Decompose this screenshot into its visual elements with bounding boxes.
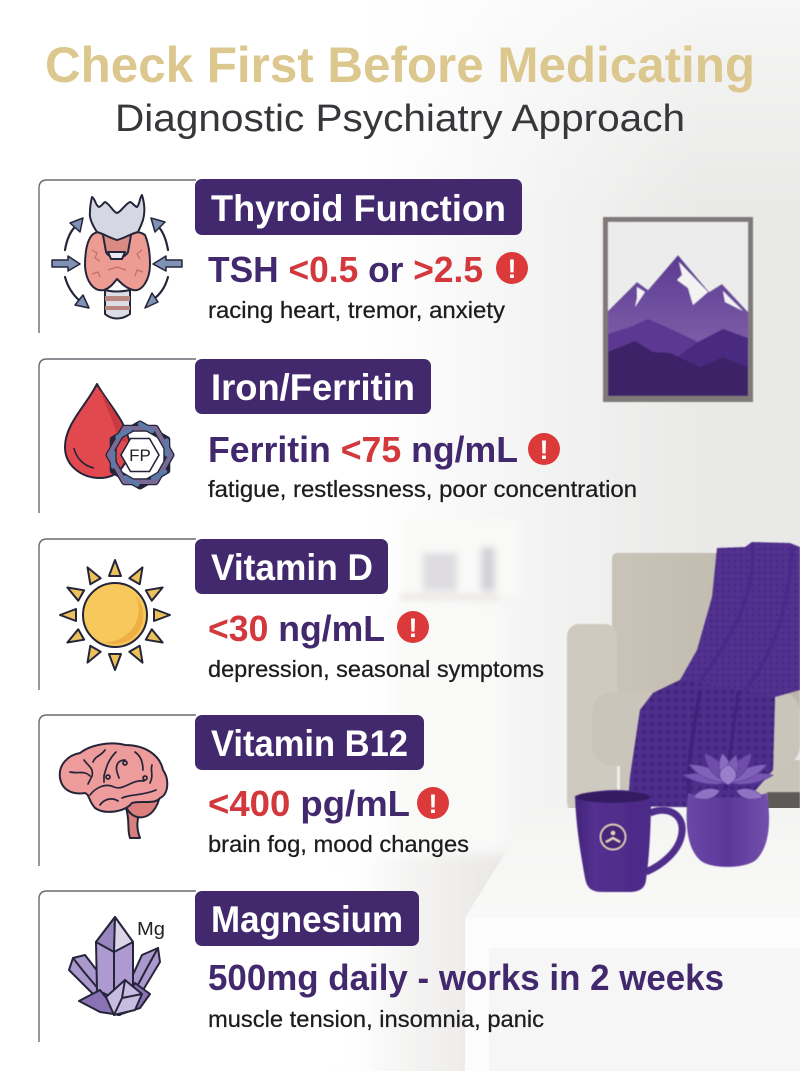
heading pill (195, 359, 431, 414)
heading pill: Vitamin B12 (211, 723, 408, 764)
symptoms: muscle tension, insomnia, panic (208, 1006, 544, 1032)
icon: sun (60, 560, 170, 670)
panel: vitamin b12 (39, 715, 469, 866)
wall art: framed mountains (603, 217, 753, 402)
title: Check First Before Medicating (45, 37, 755, 93)
icon: thyroid (52, 195, 182, 318)
lab threshold: ! (508, 254, 516, 284)
heading pill: Vitamin D (211, 547, 373, 588)
heading pill (195, 179, 522, 235)
purple mug (575, 790, 682, 892)
icon: blood drop with ferritin ring: FP (129, 446, 151, 465)
symptoms: brain fog, mood changes (208, 831, 469, 857)
panel: magnesium (39, 891, 724, 1042)
lab threshold: ! (540, 435, 548, 465)
heading pill: Thyroid Function (211, 188, 506, 229)
panel: iron/ferritin (39, 359, 637, 513)
heading pill: Magnesium (211, 899, 403, 940)
icon: blood drop with ferritin ring (65, 384, 171, 486)
icon: brain (60, 743, 167, 838)
purple knit blanket (628, 542, 800, 808)
lab threshold: TSH <0.5 or >2.5 (208, 249, 483, 290)
lab threshold: ! (428, 789, 438, 819)
symptoms: depression, seasonal symptoms (208, 656, 544, 682)
subtitle: Diagnostic Psychiatry Approach (115, 98, 685, 140)
lab threshold: <30 ng/mL (208, 608, 385, 649)
sofa (567, 553, 800, 814)
symptoms: fatigue, restlessness, poor concentration (208, 476, 637, 502)
lab threshold: ! (408, 613, 418, 643)
heading pill: Iron/Ferritin (211, 367, 415, 408)
heading pill (195, 539, 388, 594)
icon: magnesium crystals: Mg (137, 918, 165, 939)
white table (465, 808, 800, 1071)
lab threshold: <400 pg/mL (208, 783, 410, 824)
heading pill (195, 891, 419, 946)
lab recommendation: 500mg daily - works in 2 weeks (208, 957, 724, 998)
lab threshold: Ferritin <75 ng/mL (208, 429, 518, 470)
symptoms: racing heart, tremor, anxiety (208, 297, 506, 323)
heading pill (195, 715, 424, 770)
purple pot with succulent (682, 751, 774, 867)
panel: vitamin d (39, 539, 544, 690)
icon: magnesium crystals (69, 917, 165, 1015)
panel: thyroid function (39, 179, 528, 333)
